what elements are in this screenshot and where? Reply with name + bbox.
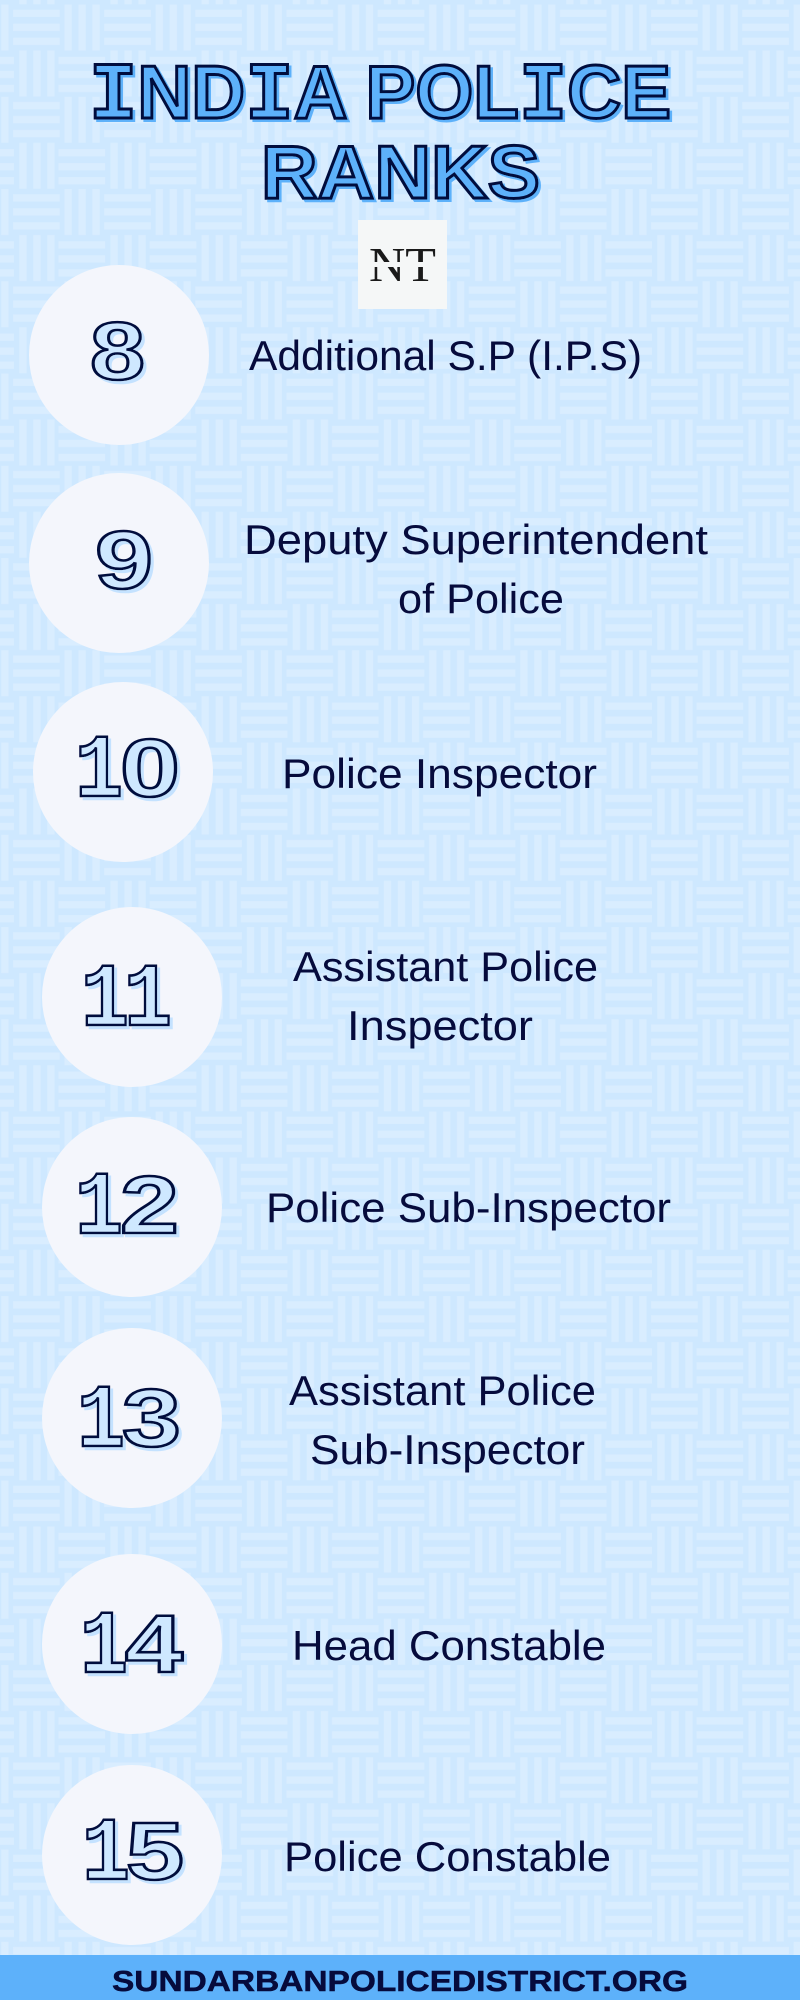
footer banner <box>0 1955 800 2000</box>
rank 15 label: Police Constable <box>284 1833 611 1880</box>
rank 13 label: Sub-Inspector <box>310 1426 585 1473</box>
rank 11 number: 1 <box>81 951 129 1053</box>
rank 14 label: Head Constable <box>292 1622 606 1669</box>
rank 11 circle <box>42 907 222 1087</box>
logo: NT badge: NT <box>369 237 436 292</box>
rank 9 label: of Police <box>398 575 564 622</box>
rank 10 label: Police Inspector <box>282 750 597 797</box>
rank 15 number: 1 <box>82 1805 130 1907</box>
footer website text: SUNDARBANPOLICEDISTRICT.ORG <box>112 1966 688 1998</box>
rank 14 circle <box>42 1554 222 1734</box>
title <box>89 50 671 214</box>
rank 11 label: Inspector <box>347 1002 533 1049</box>
rank 14 number: 1 <box>80 1598 128 1700</box>
rank 15 row <box>42 1765 611 1945</box>
rank 9 label <box>244 516 708 622</box>
title: RANKS <box>261 130 540 214</box>
rank 13 number: 3 <box>122 1373 181 1464</box>
rank 11 label <box>293 943 598 1049</box>
rank 11 row <box>42 907 598 1087</box>
rank 14 row <box>42 1554 606 1734</box>
rank 10 row <box>33 682 597 862</box>
rank 9 circle <box>29 473 209 653</box>
rank 12 label: Police Sub-Inspector <box>266 1184 671 1231</box>
rank 15 number: 5 <box>126 1806 184 1897</box>
rank 8 label: Additional S.P (I.P.S) <box>249 332 642 379</box>
rank 8 row <box>29 265 642 445</box>
rank 10 number: 1 <box>75 722 123 824</box>
rank 15 circle <box>42 1765 222 1945</box>
rank 13 label: Assistant Police <box>289 1367 596 1414</box>
rank 12 circle <box>42 1117 222 1297</box>
rank 13 number: 1 <box>77 1372 125 1474</box>
rank 12 row <box>42 1117 671 1297</box>
rank 10 number: 0 <box>120 723 180 814</box>
rank 13 row <box>42 1328 596 1508</box>
rank 9 row <box>29 473 708 653</box>
rank 12 number: 1 <box>75 1159 123 1261</box>
title: INDIA POLICE <box>89 50 671 143</box>
rank 8 number: 8 <box>90 306 145 397</box>
rank 14 number: 4 <box>125 1599 183 1690</box>
logo: NT badge <box>358 220 447 309</box>
rank 9 number: 9 <box>95 515 153 606</box>
rank 13 circle <box>42 1328 222 1508</box>
rank 10 circle <box>33 682 213 862</box>
rank 11 label: Assistant Police <box>293 943 598 990</box>
rank 11 number: 1 <box>124 951 172 1053</box>
rank 9 label: Deputy Superintendent <box>244 516 708 563</box>
rank 8 circle <box>29 265 209 445</box>
rank 12 number: 2 <box>120 1160 179 1251</box>
rank 13 label <box>289 1367 596 1473</box>
